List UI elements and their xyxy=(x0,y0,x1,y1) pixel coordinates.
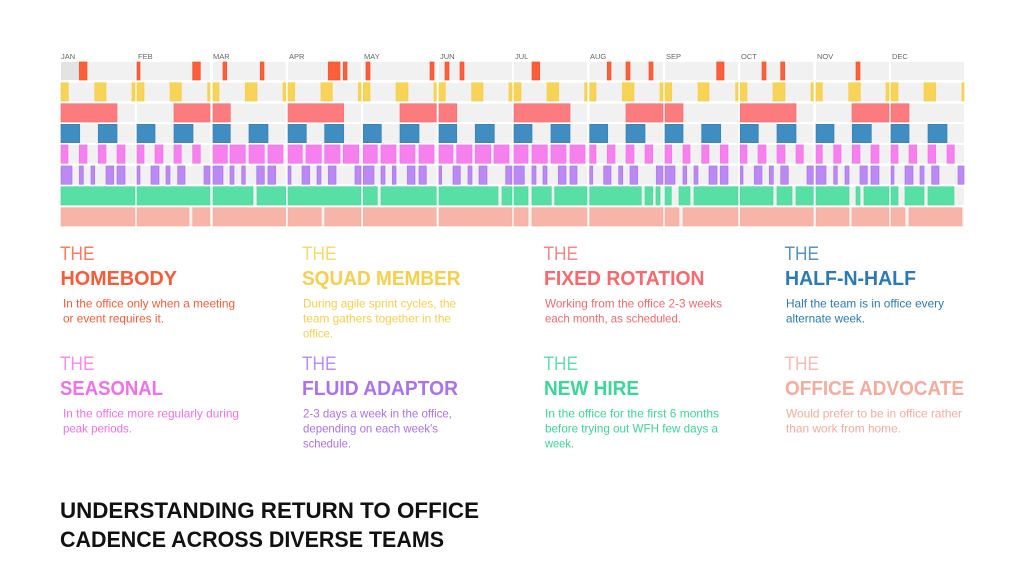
row: half-n-half xyxy=(61,124,947,143)
month labels: MAY xyxy=(364,52,380,61)
legend: the office advocate: THE xyxy=(784,353,819,375)
legend: the seasonal xyxy=(60,353,239,435)
legend: the fluid adaptor: THE xyxy=(302,353,336,375)
row: homebody xyxy=(79,62,860,80)
month labels: SEP xyxy=(666,52,681,61)
title: CADENCE ACROSS DIVERSE TEAMS xyxy=(60,527,444,552)
month labels xyxy=(61,52,908,61)
legend: the fluid adaptor: depending on each week's xyxy=(303,421,438,435)
legend: the fluid adaptor: schedule. xyxy=(303,436,351,450)
legend: the new hire: week. xyxy=(544,436,574,450)
legend: the squad member: office. xyxy=(303,327,333,341)
legend: the half-n-half xyxy=(784,243,944,326)
legend: the new hire: In the office for the first 6 months xyxy=(545,406,719,420)
month labels: JUN xyxy=(440,52,455,61)
title: UNDERSTANDING RETURN TO OFFICE xyxy=(60,498,479,523)
legend: the fluid adaptor xyxy=(302,353,459,450)
legend: the squad member: During agile sprint cycles, the xyxy=(303,297,456,311)
month labels: FEB xyxy=(138,52,153,61)
title xyxy=(60,498,479,552)
legend: the homebody: HOMEBODY xyxy=(60,268,178,290)
month labels: APR xyxy=(289,52,305,61)
legend: the squad member: team gathers together in the xyxy=(303,312,451,326)
legend: the fluid adaptor: 2-3 days a week in the office, xyxy=(303,406,452,420)
legend: the fixed rotation xyxy=(544,243,722,326)
row: seasonal xyxy=(61,145,954,163)
legend: the seasonal: THE xyxy=(60,353,94,375)
legend: the homebody: THE xyxy=(60,243,94,265)
legend: the new hire xyxy=(544,353,719,450)
legend: the office advocate: than work from home. xyxy=(786,421,901,435)
month labels: JAN xyxy=(61,52,75,61)
legend: the squad member: THE xyxy=(302,243,336,265)
legend: the half-n-half: THE xyxy=(784,243,819,265)
legend: the homebody: In the office only when a meeting xyxy=(63,297,235,311)
row: squad member xyxy=(61,83,964,101)
legend: the homebody: or event requires it. xyxy=(63,312,164,326)
legend: the squad member xyxy=(302,243,461,341)
legend: the new hire: THE xyxy=(544,353,578,375)
legend: the fixed rotation: each month, as scheduled. xyxy=(545,312,681,326)
legend: the fluid adaptor: FLUID ADAPTOR xyxy=(302,378,459,400)
month labels: JUL xyxy=(515,52,528,61)
row: new hire xyxy=(61,187,954,205)
legend: the homebody xyxy=(60,243,235,326)
legend: the squad member: SQUAD MEMBER xyxy=(302,268,461,290)
legend: the half-n-half: alternate week. xyxy=(786,312,865,326)
month background bands xyxy=(61,62,964,226)
legend: the office advocate xyxy=(784,353,964,435)
month labels: MAR xyxy=(213,52,230,61)
legend: the seasonal: In the office more regularly during xyxy=(63,406,239,420)
legend: the half-n-half: HALF-N-HALF xyxy=(785,268,916,290)
row: office advocate xyxy=(61,208,962,226)
row: fixed rotation xyxy=(61,104,909,122)
legend: the new hire: NEW HIRE xyxy=(544,378,639,400)
legend: the fixed rotation: Working from the office 2-3 weeks xyxy=(545,297,722,311)
month labels: AUG xyxy=(590,52,606,61)
legend: the office advocate: Would prefer to be in office rather xyxy=(786,406,962,420)
legend: the half-n-half: Half the team is in office every xyxy=(786,297,944,311)
legend: the seasonal: SEASONAL xyxy=(60,378,163,400)
month labels: DEC xyxy=(892,52,908,61)
row: fluid adaptor xyxy=(61,166,964,184)
legend: the seasonal: peak periods. xyxy=(63,421,132,435)
month labels: OCT xyxy=(741,52,757,61)
legend: the office advocate: OFFICE ADVOCATE xyxy=(785,378,964,400)
legend: the fixed rotation: THE xyxy=(544,243,578,265)
month labels: NOV xyxy=(817,52,833,61)
legend: the fixed rotation: FIXED ROTATION xyxy=(544,268,704,290)
calendar chart xyxy=(61,52,964,226)
legend: the new hire: before trying out WFH few days a xyxy=(545,421,718,435)
